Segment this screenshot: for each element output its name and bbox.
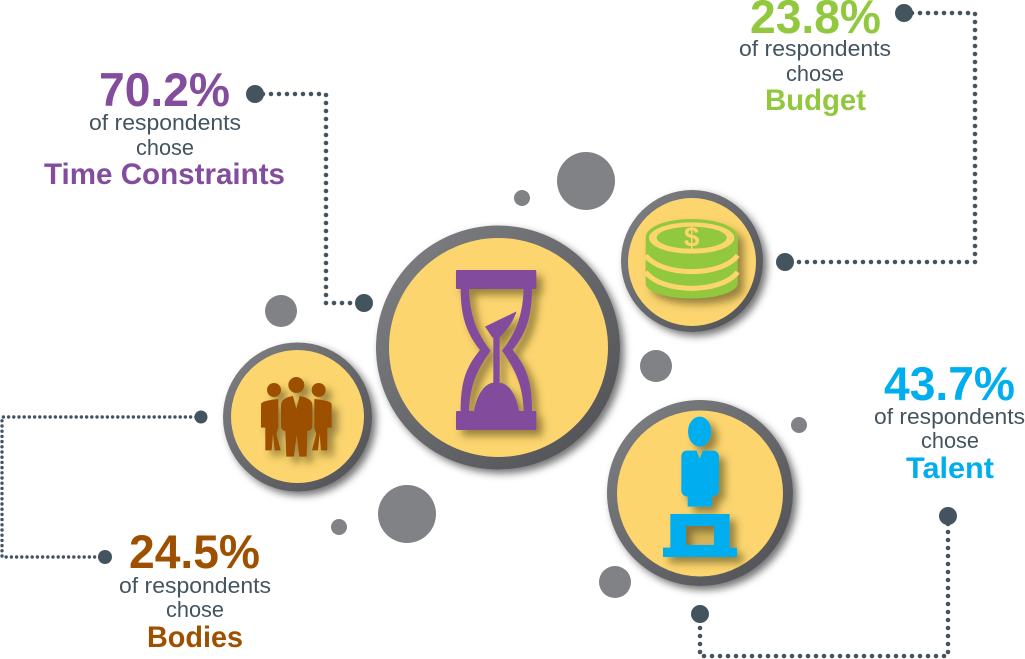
text block: time constraints: 70.2% bbox=[99, 63, 230, 116]
text block: talent: 43.7% bbox=[884, 357, 1015, 410]
text block: budget bbox=[739, 0, 891, 117]
text block: time constraints bbox=[44, 63, 285, 191]
icon: three people bbox=[261, 377, 332, 457]
icon: person on podium bbox=[663, 417, 737, 557]
icon: coin stack: $ bbox=[684, 222, 700, 253]
icon: hourglass bbox=[456, 270, 536, 430]
text block: time constraints: chose bbox=[136, 135, 194, 160]
text block: time constraints: Time Constraints bbox=[44, 158, 285, 191]
panel: budget circle bbox=[621, 190, 763, 332]
text block: bodies bbox=[119, 525, 271, 654]
connector: budget bbox=[776, 4, 975, 271]
text block: budget: of respondents bbox=[739, 36, 891, 61]
text block: bodies: 24.5% bbox=[129, 525, 260, 578]
text block: bodies: Bodies bbox=[147, 621, 243, 654]
text block: budget: chose bbox=[786, 61, 844, 86]
text block: talent: Talent bbox=[906, 452, 994, 485]
text block: budget: Budget bbox=[765, 84, 866, 117]
text block: talent: chose bbox=[921, 428, 979, 453]
panel: bodies circle bbox=[223, 342, 372, 492]
text block: talent: of respondents bbox=[874, 404, 1025, 429]
text block: bodies: chose bbox=[166, 597, 224, 622]
connector: talent bbox=[691, 507, 957, 656]
connector: bodies bbox=[2, 410, 208, 564]
icon: coin stack bbox=[646, 219, 738, 298]
panel: time constraints circle bbox=[376, 226, 620, 470]
connector: time constraints bbox=[246, 85, 373, 312]
text block: time constraints: of respondents bbox=[89, 110, 241, 135]
text block: bodies: of respondents bbox=[119, 573, 271, 598]
text block: talent bbox=[874, 357, 1025, 485]
decorative grey bubbles bbox=[265, 152, 807, 598]
panel: talent circle bbox=[607, 400, 793, 586]
